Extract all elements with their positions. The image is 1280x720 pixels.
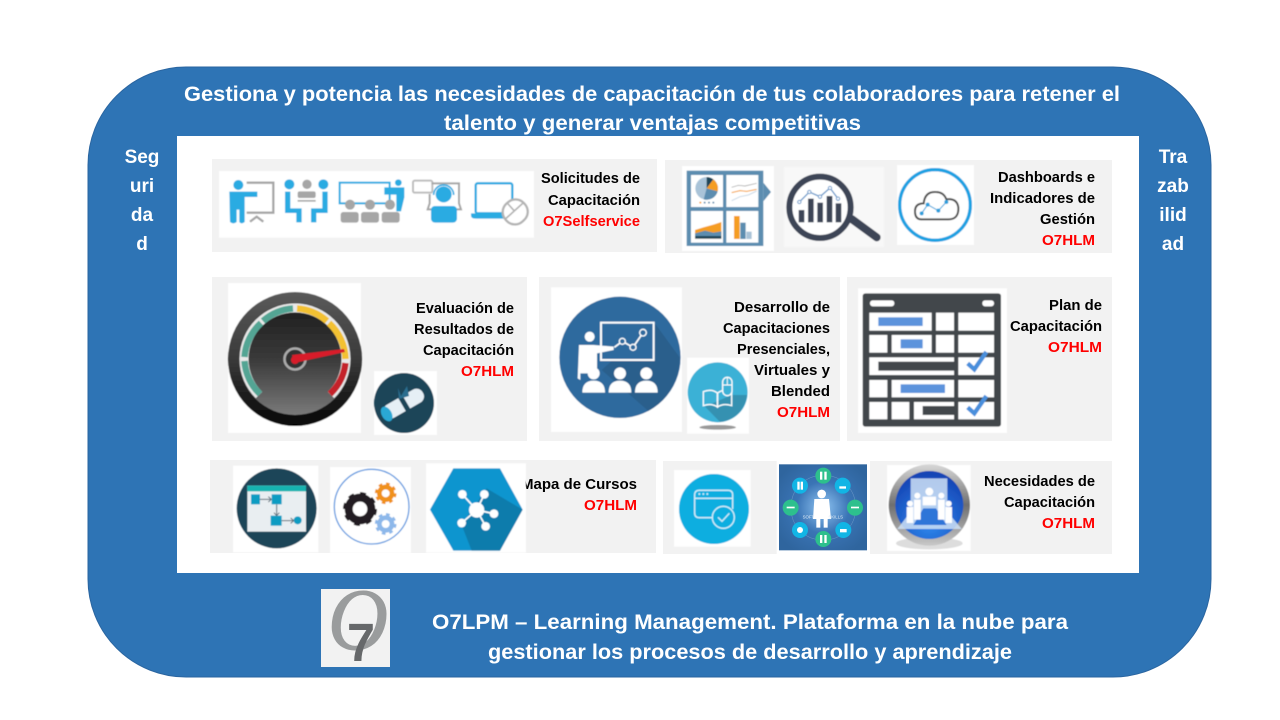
icon: magnifier with chart [784,167,884,247]
title: Gestiona y potencia las necesidades de capacitación de tus colaboradores para retener el [184,83,1120,106]
logo: O7: O [328,572,388,669]
label: Necesidades de Capacitación O7HLM: O7HLM [1042,516,1095,532]
icon: cloud analytics [897,165,974,245]
label: Evaluación de Resultados de Capacitación O7HLM [414,301,514,380]
left side label: Seguridad [125,147,159,255]
label: Mapa de Cursos O7HLM: Mapa de Cursos [521,477,637,493]
label: Dashboards e Indicadores de Gestión O7HLM: Dashboards e [998,170,1095,186]
label: Dashboards e Indicadores de Gestión O7HLM: O7HLM [1042,233,1095,249]
label: Necesidades de Capacitación O7HLM [984,474,1095,532]
panel: Necesidades de Capacitación [663,461,1112,554]
left side label: Seguridad: da [131,205,154,226]
icon: soft skills: SKILLS [828,514,843,519]
label: Desarrollo de Capacitaciones Presenciales, Virtuales y Blended O7HLM [723,300,830,421]
icon: network hexagon [426,463,526,553]
right side label: Trazabilidad: zab [1157,176,1189,197]
label: Plan de Capacitación O7HLM: O7HLM [1048,340,1102,356]
icon strip: training modes [219,171,534,238]
icon: diploma [374,371,437,435]
right side label: Trazabilidad: Tra [1159,147,1188,168]
icon: gauge [228,283,362,433]
icon: gears [330,467,411,553]
icon: soft skills: SOFT [803,514,815,519]
footer description: O7LPM – Learning Management. Plataforma en la nube para [432,611,1068,634]
icon: classroom presentation [551,287,682,432]
label: Plan de Capacitación O7HLM: Capacitación [1010,319,1102,335]
label: Solicitudes de Capacitación O7Selfservice [541,171,640,230]
panel: Dashboards e Indicadores de Gestión [665,160,1112,253]
logo: O7: 7 [347,613,375,673]
label: Desarrollo de Capacitaciones Presenciales, Virtuales y Blended O7HLM: Presenciales, [737,342,830,358]
label: Evaluación de Resultados de Capacitación O7HLM: Capacitación [423,343,514,359]
label: Solicitudes de Capacitación O7Selfservice: Capacitación [548,193,640,209]
icon: meeting room button [887,464,971,551]
icon: soft skills [777,461,870,554]
label: Dashboards e Indicadores de Gestión O7HLM: Gestión [1040,212,1095,228]
label: Evaluación de Resultados de Capacitación O7HLM: Evaluación de [416,301,514,317]
label: Necesidades de Capacitación O7HLM: Necesidades de [984,474,1095,490]
footer description [432,611,1068,664]
right side label: Trazabilidad: ilid [1159,205,1187,226]
label: Necesidades de Capacitación O7HLM: Capacitación [1004,495,1095,511]
label: Evaluación de Resultados de Capacitación O7HLM: O7HLM [461,364,514,380]
blue rounded background frame [88,67,1211,677]
label: Desarrollo de Capacitaciones Presenciales, Virtuales y Blended O7HLM: O7HLM [777,405,830,421]
label: Plan de Capacitación O7HLM [1010,298,1102,356]
label: Dashboards e Indicadores de Gestión O7HLM [990,170,1095,249]
footer description: gestionar los procesos de desarrollo y aprendizaje [488,641,1012,664]
icon: gantt plan table [858,288,1007,433]
white content area [177,136,1139,573]
left side label: Seguridad: d [136,234,148,255]
panel: Plan de Capacitación [847,277,1112,441]
label: Desarrollo de Capacitaciones Presenciales, Virtuales y Blended O7HLM: Virtuales y [754,363,830,379]
panel: Evaluación de Resultados de Capacitación [212,277,527,441]
left side label: Seguridad: uri [130,176,154,197]
label: Plan de Capacitación O7HLM: Plan de [1049,298,1102,314]
panel: Mapa de Cursos [210,460,656,553]
label: Dashboards e Indicadores de Gestión O7HLM: Indicadores de [990,191,1095,207]
label: Solicitudes de Capacitación O7Selfservice: O7Selfservice [543,214,640,230]
title [184,83,1120,135]
label: Solicitudes de Capacitación O7Selfservice: Solicitudes de [541,171,640,187]
left side label: Seguridad: Seg [125,147,159,168]
label: Desarrollo de Capacitaciones Presenciales, Virtuales y Blended O7HLM: Capacitaciones [723,321,830,337]
panel: Desarrollo de Capacitaciones [539,277,840,441]
label: Desarrollo de Capacitaciones Presenciales, Virtuales y Blended O7HLM: Blended [771,384,830,400]
label: Desarrollo de Capacitaciones Presenciales, Virtuales y Blended O7HLM: Desarrollo de [734,300,830,316]
icon: e-learning book and mouse [687,358,749,434]
right side label: Trazabilidad: ad [1162,234,1184,255]
panel: Solicitudes de Capacitación [212,159,657,252]
label: Evaluación de Resultados de Capacitación O7HLM: Resultados de [414,322,514,338]
label: Mapa de Cursos O7HLM: O7HLM [584,498,637,514]
icon: browser check [674,470,751,547]
label: Mapa de Cursos O7HLM [521,477,637,514]
icon: dashboard charts [682,166,774,251]
title: talento y generar ventajas competitivas [444,112,861,135]
icon: process flow [233,466,318,552]
right side label: Trazabilidad [1157,147,1189,255]
